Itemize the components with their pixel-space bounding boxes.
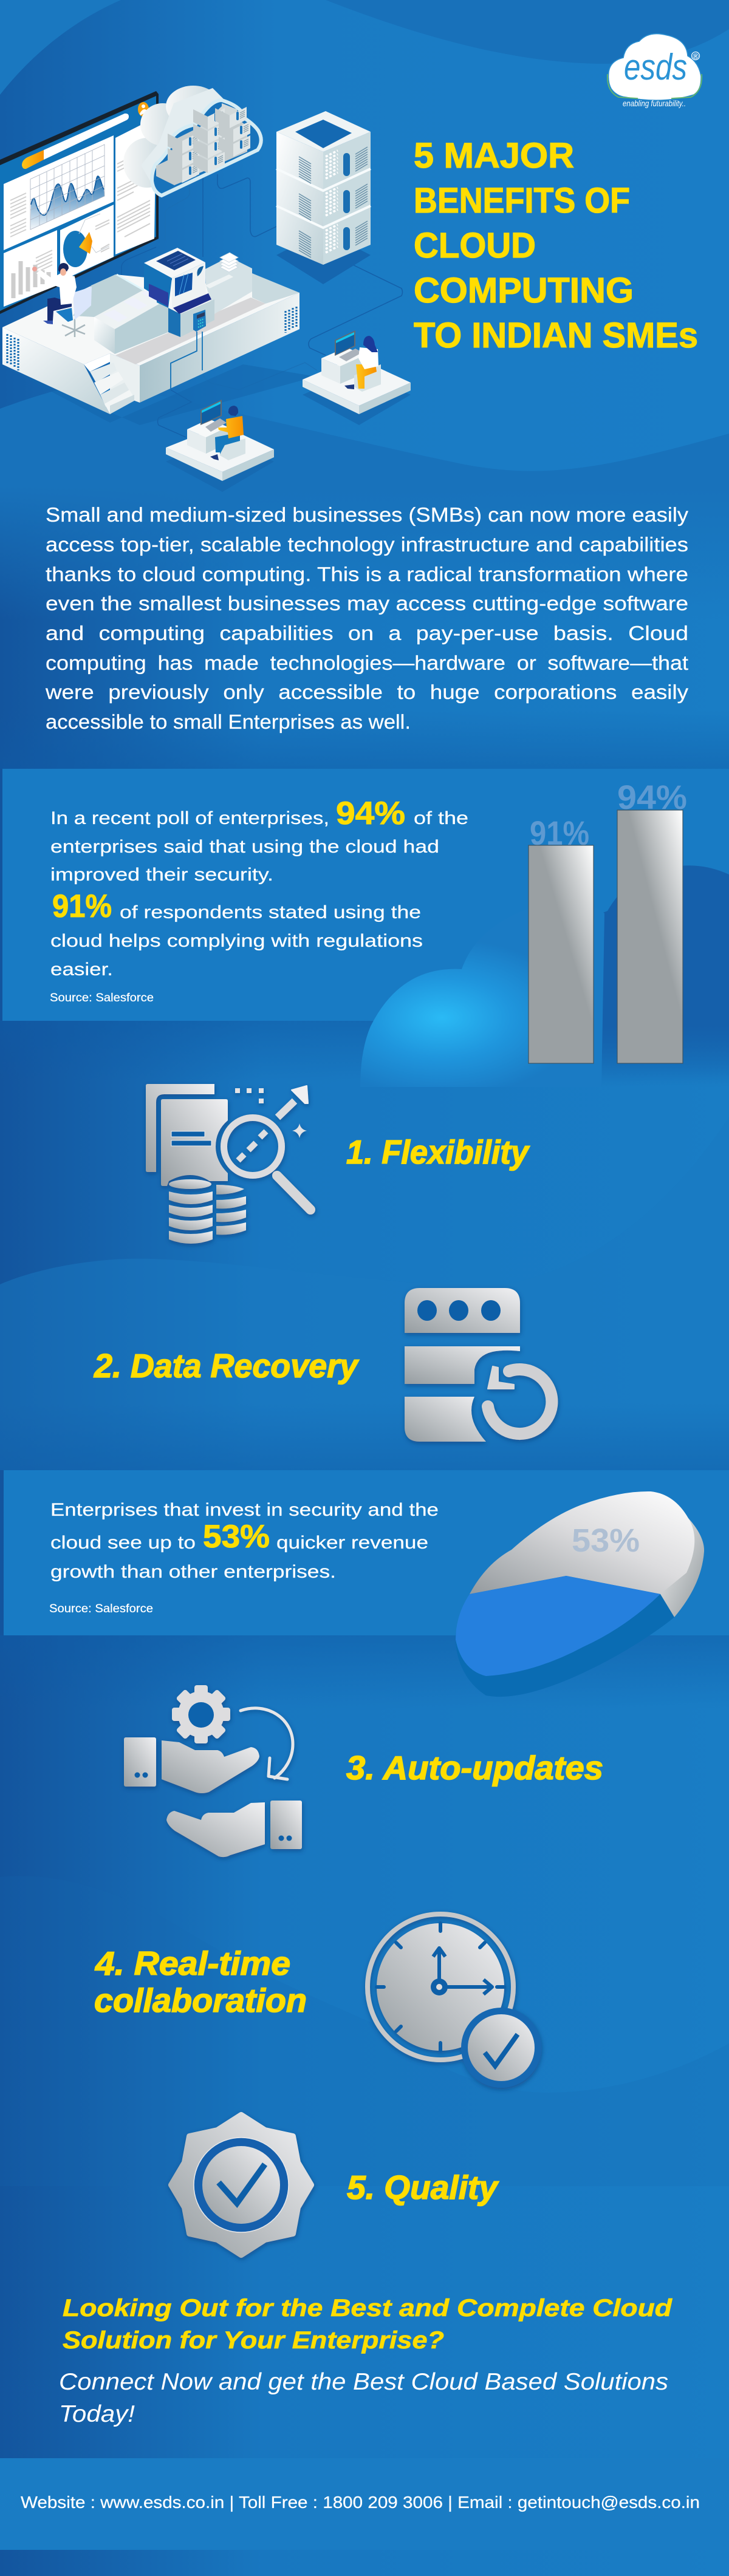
logo: esds bbox=[608, 34, 702, 108]
benefit 1: flexibility bbox=[146, 1084, 530, 1244]
revenue text: cloud see up to bbox=[50, 1533, 196, 1553]
heading: 5. Quality bbox=[347, 2169, 499, 2206]
bar chart bbox=[529, 778, 687, 1063]
poll text: Source: Salesforce bbox=[50, 992, 154, 1004]
revenue text: growth than other enterprises. bbox=[50, 1562, 336, 1582]
pie chart bbox=[456, 1491, 704, 1697]
stairs bbox=[84, 353, 134, 414]
title bbox=[414, 136, 698, 355]
title: CLOUD bbox=[414, 226, 536, 265]
bar chart: 94% bbox=[617, 778, 687, 816]
cloud backdrop bbox=[360, 865, 729, 1087]
title: BENEFITS OF bbox=[414, 181, 630, 220]
benefit 3: auto-updates bbox=[124, 1685, 603, 1857]
heading bbox=[94, 1944, 307, 2019]
poll text: of the bbox=[414, 808, 468, 828]
icon: quality badge bbox=[171, 2115, 311, 2255]
main platform bbox=[0, 253, 316, 425]
panel: revenue growth stat bbox=[4, 1470, 729, 1697]
hero illustration: cloud data centre bbox=[0, 86, 411, 492]
poll text: In a recent poll of enterprises, bbox=[50, 808, 329, 828]
benefit 2: data recovery bbox=[94, 1288, 552, 1442]
machine bbox=[144, 248, 214, 389]
cloud with servers bbox=[123, 86, 261, 196]
rear block bbox=[205, 257, 252, 314]
cta text bbox=[59, 2369, 668, 2427]
heading: 1. Flexibility bbox=[346, 1133, 530, 1171]
heading: 3. Auto-updates bbox=[346, 1749, 603, 1787]
icon: documents, magnifier and database bbox=[146, 1084, 310, 1244]
right developer desk bbox=[303, 330, 411, 425]
intro paragraph: accessible to small Enterprises as well. bbox=[46, 710, 411, 733]
intro paragraph: even the smallest businesses may access cutting-edge software bbox=[46, 592, 688, 615]
poll text: 94% bbox=[336, 796, 405, 831]
poll text bbox=[50, 796, 468, 1004]
intro paragraph: and computing capabilities on a pay-per-use basis. Cloud bbox=[46, 622, 688, 644]
benefit 4: real-time collaboration bbox=[94, 1914, 541, 2088]
icon: server with recovery arrow bbox=[405, 1288, 552, 1442]
pie chart: 53% bbox=[572, 1522, 640, 1559]
logo: esds: ® bbox=[693, 52, 699, 61]
heading: 2. Data Recovery bbox=[94, 1347, 359, 1385]
monitor dashboard bbox=[0, 91, 159, 314]
poll text: cloud helps complying with regulations bbox=[50, 931, 423, 951]
title: TO INDIAN SMEs bbox=[414, 316, 698, 355]
intro paragraph: thanks to cloud computing. This is a radical transformation where bbox=[46, 563, 688, 585]
intro paragraph bbox=[45, 503, 689, 733]
cta heading: Looking Out for the Best and Complete Cloud bbox=[63, 2295, 673, 2322]
revenue text: Enterprises that invest in security and the bbox=[50, 1500, 439, 1520]
footer contact bar bbox=[0, 2458, 729, 2550]
server tower bbox=[276, 111, 371, 284]
revenue text: quicker revenue bbox=[276, 1533, 428, 1553]
title: 5 MAJOR bbox=[414, 136, 574, 175]
revenue text: Source: Salesforce bbox=[49, 1603, 153, 1615]
poll text: of respondents stated using the bbox=[120, 902, 421, 922]
raised paper block bbox=[94, 290, 168, 329]
poll text: easier. bbox=[50, 959, 113, 980]
circuit lines bbox=[122, 174, 402, 437]
person at dashboard bbox=[32, 263, 92, 337]
heading: 4. Real-time bbox=[95, 1944, 290, 1982]
title: COMPUTING bbox=[414, 271, 634, 310]
intro paragraph: were previously only accessible to huge corporations easily bbox=[45, 681, 689, 703]
cta heading: Solution for Your Enterprise? bbox=[63, 2327, 444, 2354]
logo: esds: enabling futurability.. bbox=[623, 98, 686, 108]
panel: security stats bbox=[2, 769, 729, 1087]
poll text: improved their security. bbox=[50, 865, 273, 885]
footer contact bar: Website : www.esds.co.in | Toll Free : 1800 209 3006 | Email : getintouch@esds.co.in bbox=[21, 2493, 700, 2512]
paper stack bbox=[220, 253, 238, 272]
call to action bbox=[59, 2295, 673, 2427]
benefit 5: quality bbox=[171, 2115, 499, 2255]
cta heading bbox=[63, 2295, 673, 2354]
intro paragraph: Small and medium-sized businesses (SMBs) can now more easily bbox=[46, 503, 689, 526]
revenue text bbox=[49, 1500, 439, 1615]
intro paragraph: access top-tier, scalable technology infrastructure and capabilities bbox=[46, 533, 688, 556]
cta text: Today! bbox=[59, 2401, 135, 2427]
bottom developer desk bbox=[166, 400, 274, 492]
heading: collaboration bbox=[94, 1981, 307, 2019]
icon: hands with gear bbox=[124, 1685, 302, 1857]
poll text: 91% bbox=[52, 888, 112, 924]
logo: esds: esds bbox=[624, 47, 687, 87]
chart bbox=[30, 176, 104, 230]
grills on platform bbox=[7, 334, 18, 370]
poll text: enterprises said that using the cloud had bbox=[50, 837, 439, 857]
intro paragraph: computing has made technologies—hardware or software—that bbox=[46, 652, 688, 674]
icon: clock with check bbox=[368, 1914, 541, 2088]
bar chart: 91% bbox=[530, 814, 589, 852]
cta text: Connect Now and get the Best Cloud Based Solutions bbox=[59, 2369, 668, 2395]
revenue text: 53% bbox=[203, 1519, 270, 1555]
